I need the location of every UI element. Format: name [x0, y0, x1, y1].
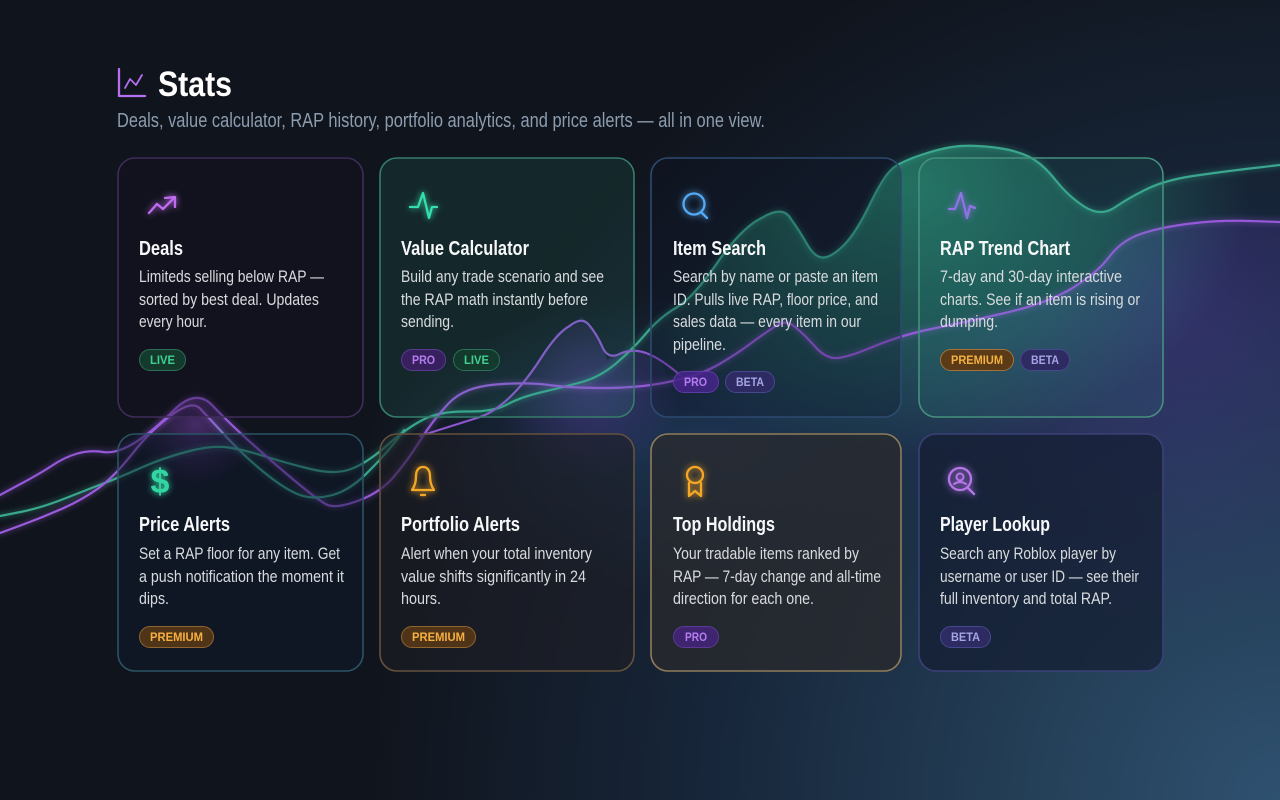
- badge: PREMIUM: [140, 626, 214, 648]
- badge: BETA: BETA: [1031, 355, 1059, 367]
- badge: PRO: PRO: [412, 355, 435, 367]
- text block: dumping.: [940, 312, 998, 331]
- text block: [139, 267, 324, 331]
- text block: Set a RAP floor for any item. Get: [139, 544, 340, 563]
- text block: Build any trade scenario and see: [401, 267, 604, 286]
- heading: Item Search: [673, 237, 766, 260]
- header: [117, 65, 765, 132]
- line: teal main series: [0, 146, 1280, 516]
- badge: PRO: [674, 626, 718, 648]
- line: secondary purple peak: [420, 321, 680, 436]
- badge: PRO: [674, 372, 718, 392]
- icon: activity pulse: [410, 193, 437, 218]
- icon: magnifier: [684, 194, 707, 218]
- heading: RAP Trend Chart: [940, 237, 1070, 260]
- panel: Deals: [118, 158, 363, 417]
- panel: Value Calculator: [380, 158, 634, 417]
- text block: [401, 267, 604, 331]
- badge: LIVE: [140, 350, 186, 370]
- subtitle: Deals, value calculator, RAP history, portfolio analytics, and price alerts — all in one view.: [117, 109, 765, 132]
- badge: PREMIUM: PREMIUM: [412, 632, 465, 644]
- background glow: [360, 295, 1040, 595]
- text block: username or user ID — see their: [940, 567, 1139, 586]
- panel: Portfolio Alerts: [380, 434, 634, 671]
- badge: BETA: [940, 626, 990, 648]
- badge: LIVE: LIVE: [150, 355, 175, 367]
- badge: PREMIUM: [940, 350, 1014, 370]
- text block: sending.: [401, 312, 454, 331]
- badge: LIVE: LIVE: [464, 355, 489, 367]
- panel: Top Holdings: [651, 434, 901, 671]
- badge: PRO: PRO: [684, 377, 707, 389]
- icon: player search: [949, 468, 974, 494]
- text block: direction for each one.: [673, 589, 814, 608]
- icon: trending up: [149, 197, 175, 213]
- line: secondary series shifting purple to teal: [0, 405, 404, 533]
- heading: Portfolio Alerts: [401, 513, 520, 536]
- icon: award ribbon: [687, 467, 703, 496]
- badge: PRO: PRO: [685, 632, 707, 644]
- glow halos: [0, 146, 1280, 533]
- badge: PREMIUM: PREMIUM: [951, 355, 1003, 367]
- text block: the RAP math instantly before: [401, 290, 588, 309]
- text block: RAP — 7-day change and all-time: [673, 567, 881, 586]
- text block: every hour.: [139, 312, 207, 331]
- badge: PREMIUM: [402, 626, 476, 648]
- text block: sales data — every item in our: [673, 312, 861, 331]
- text block: [940, 267, 1140, 331]
- heading: Deals: [139, 237, 183, 260]
- panel: Player Lookup: [919, 434, 1163, 671]
- heading: Value Calculator: [401, 237, 529, 260]
- icon: line chart: [119, 69, 145, 96]
- text block: Limiteds selling below RAP —: [139, 267, 324, 286]
- badge: PRO: [402, 350, 446, 370]
- text block: [940, 544, 1139, 608]
- badge: PREMIUM: PREMIUM: [150, 632, 203, 644]
- icon: bell: [412, 467, 434, 495]
- badge: LIVE: [454, 350, 500, 370]
- text block: [673, 267, 878, 354]
- text block: Your tradable items ranked by: [673, 544, 859, 563]
- text block: charts. See if an item is rising or: [940, 290, 1140, 309]
- text block: Search by name or paste an item: [673, 267, 878, 286]
- badge: BETA: [1020, 350, 1070, 370]
- text block: sorted by best deal. Updates: [139, 290, 319, 309]
- badge: BETA: BETA: [951, 632, 980, 644]
- text block: value shifts significantly in 24: [401, 567, 586, 586]
- icon: activity pulse: [949, 193, 975, 218]
- icon: dollar sign: $: [151, 463, 170, 501]
- heading: Player Lookup: [940, 513, 1050, 536]
- badge: BETA: BETA: [736, 377, 764, 389]
- text block: full inventory and total RAP.: [940, 589, 1112, 608]
- panel: Item Search: [651, 158, 901, 417]
- text block: Alert when your total inventory: [401, 544, 592, 563]
- text block: dips.: [139, 589, 169, 608]
- text block: ID. Pulls live RAP, floor price, and: [673, 290, 878, 309]
- text block: [139, 544, 344, 608]
- text block: [401, 544, 592, 608]
- text block: a push notification the moment it: [139, 567, 344, 586]
- line: purple main series: [0, 221, 1280, 506]
- text block: [673, 544, 881, 608]
- text block: 7-day and 30-day interactive: [940, 267, 1122, 286]
- text block: hours.: [401, 589, 441, 608]
- heading: Top Holdings: [673, 513, 775, 536]
- title: Stats: [158, 65, 232, 104]
- heading: Price Alerts: [139, 513, 230, 536]
- panel: RAP Trend Chart: [919, 158, 1163, 417]
- panel: Price Alerts: [118, 434, 363, 671]
- text block: Search any Roblox player by: [940, 544, 1116, 563]
- text block: pipeline.: [673, 335, 726, 354]
- badge: BETA: [726, 372, 774, 392]
